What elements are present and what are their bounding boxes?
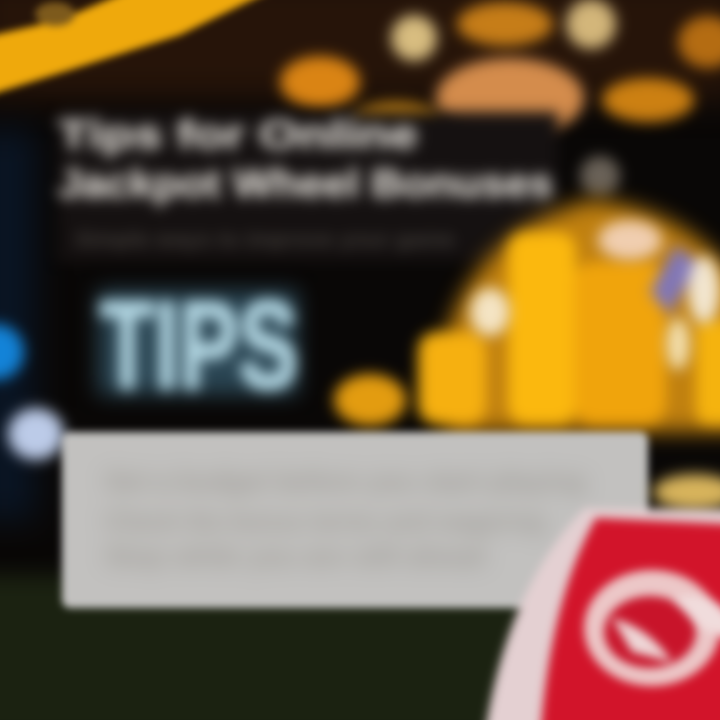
decorative lights and coins at top bbox=[280, 0, 720, 138]
big TIPS label: TIPS bbox=[100, 277, 298, 415]
panel body text: Check the bonus terms and wagering bbox=[105, 506, 545, 536]
heading panel bbox=[58, 112, 558, 262]
ornament above coin dome bbox=[580, 156, 620, 196]
chip emblem bbox=[584, 570, 720, 686]
colourful wedges bbox=[470, 220, 720, 370]
heading text: Tips for Online bbox=[58, 113, 418, 157]
yellow banner top left bbox=[0, 0, 272, 98]
red poker chip bbox=[484, 508, 720, 720]
heading text: Jackpot Wheel Bonuses bbox=[58, 162, 553, 206]
coin stacks bbox=[334, 232, 720, 426]
panel body text: Set a budget before you start playing bbox=[105, 466, 585, 496]
panel body text bbox=[105, 466, 585, 571]
panel body text: Stop while you are still ahead bbox=[105, 541, 485, 571]
gold rim above red chip bbox=[653, 474, 720, 510]
grey text panel bbox=[62, 432, 648, 608]
blue icon left edge bbox=[0, 324, 64, 460]
heading text bbox=[58, 113, 553, 206]
coin dome bbox=[334, 200, 720, 432]
subheading text: Simple ways to improve your game bbox=[75, 229, 455, 251]
